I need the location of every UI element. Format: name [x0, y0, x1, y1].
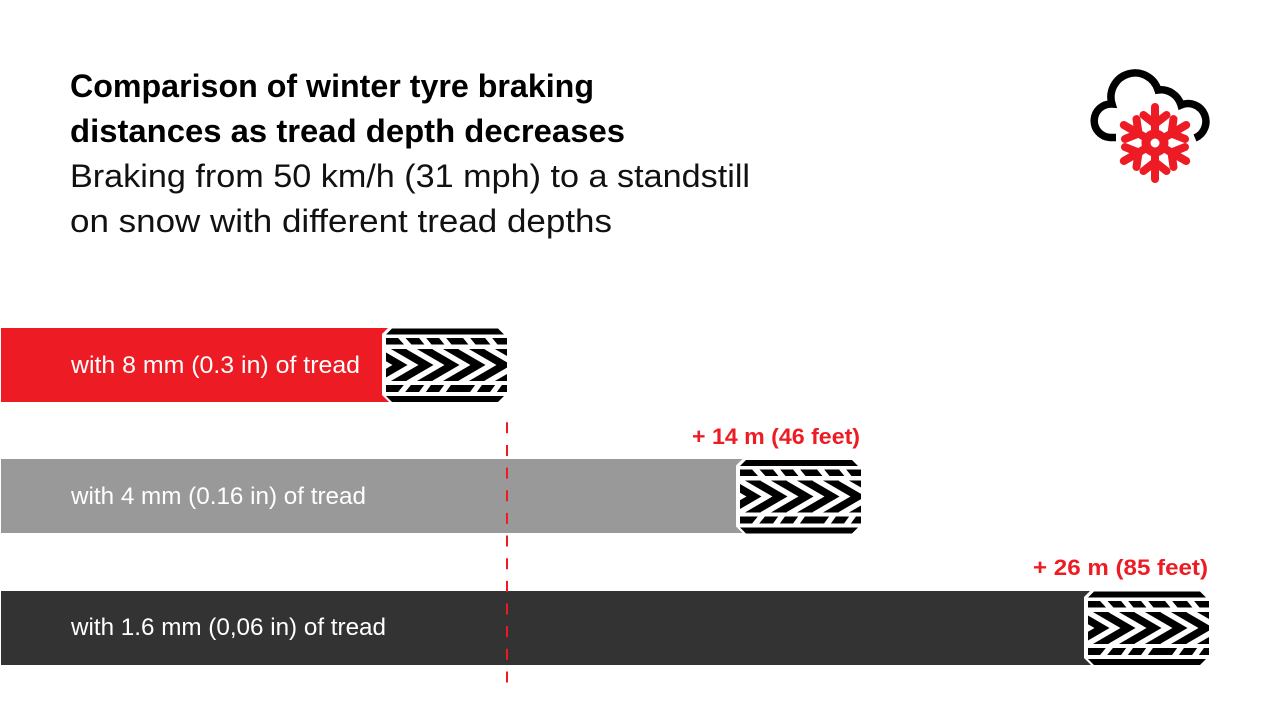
icon: tyre tread, 8 mm bar: [356, 327, 517, 402]
title: [70, 68, 625, 149]
label: +14 m: + 14 m (46 feet): [692, 424, 860, 449]
bar: 1.6 mm tread: [1, 591, 1091, 665]
bar: 8 mm tread: [1, 328, 389, 402]
label: +26 m: + 26 m (85 feet): [1033, 555, 1208, 580]
bar: 4 mm tread: [1, 459, 743, 533]
subtitle: on snow with different tread depths: [70, 203, 612, 239]
title: Comparison of winter tyre braking: [70, 68, 594, 104]
bar: 1.6 mm tread: with 1.6 mm (0,06 in) of tread: [70, 614, 386, 641]
title: distances as tread depth decreases: [70, 113, 625, 149]
bar: 4 mm tread: with 4 mm (0.16 in) of tread: [70, 483, 366, 510]
subtitle: [70, 158, 750, 239]
subtitle: Braking from 50 km/h (31 mph) to a standstill: [70, 158, 750, 194]
reference line: 8 mm braking distance: [506, 422, 508, 683]
icon: tyre tread, 1.6 mm bar: [1058, 590, 1219, 665]
icon: cloud with snowflake: [1094, 73, 1206, 179]
icon: tyre tread, 4 mm bar: [710, 458, 871, 534]
bar: 8 mm tread: with 8 mm (0.3 in) of tread: [70, 352, 360, 379]
